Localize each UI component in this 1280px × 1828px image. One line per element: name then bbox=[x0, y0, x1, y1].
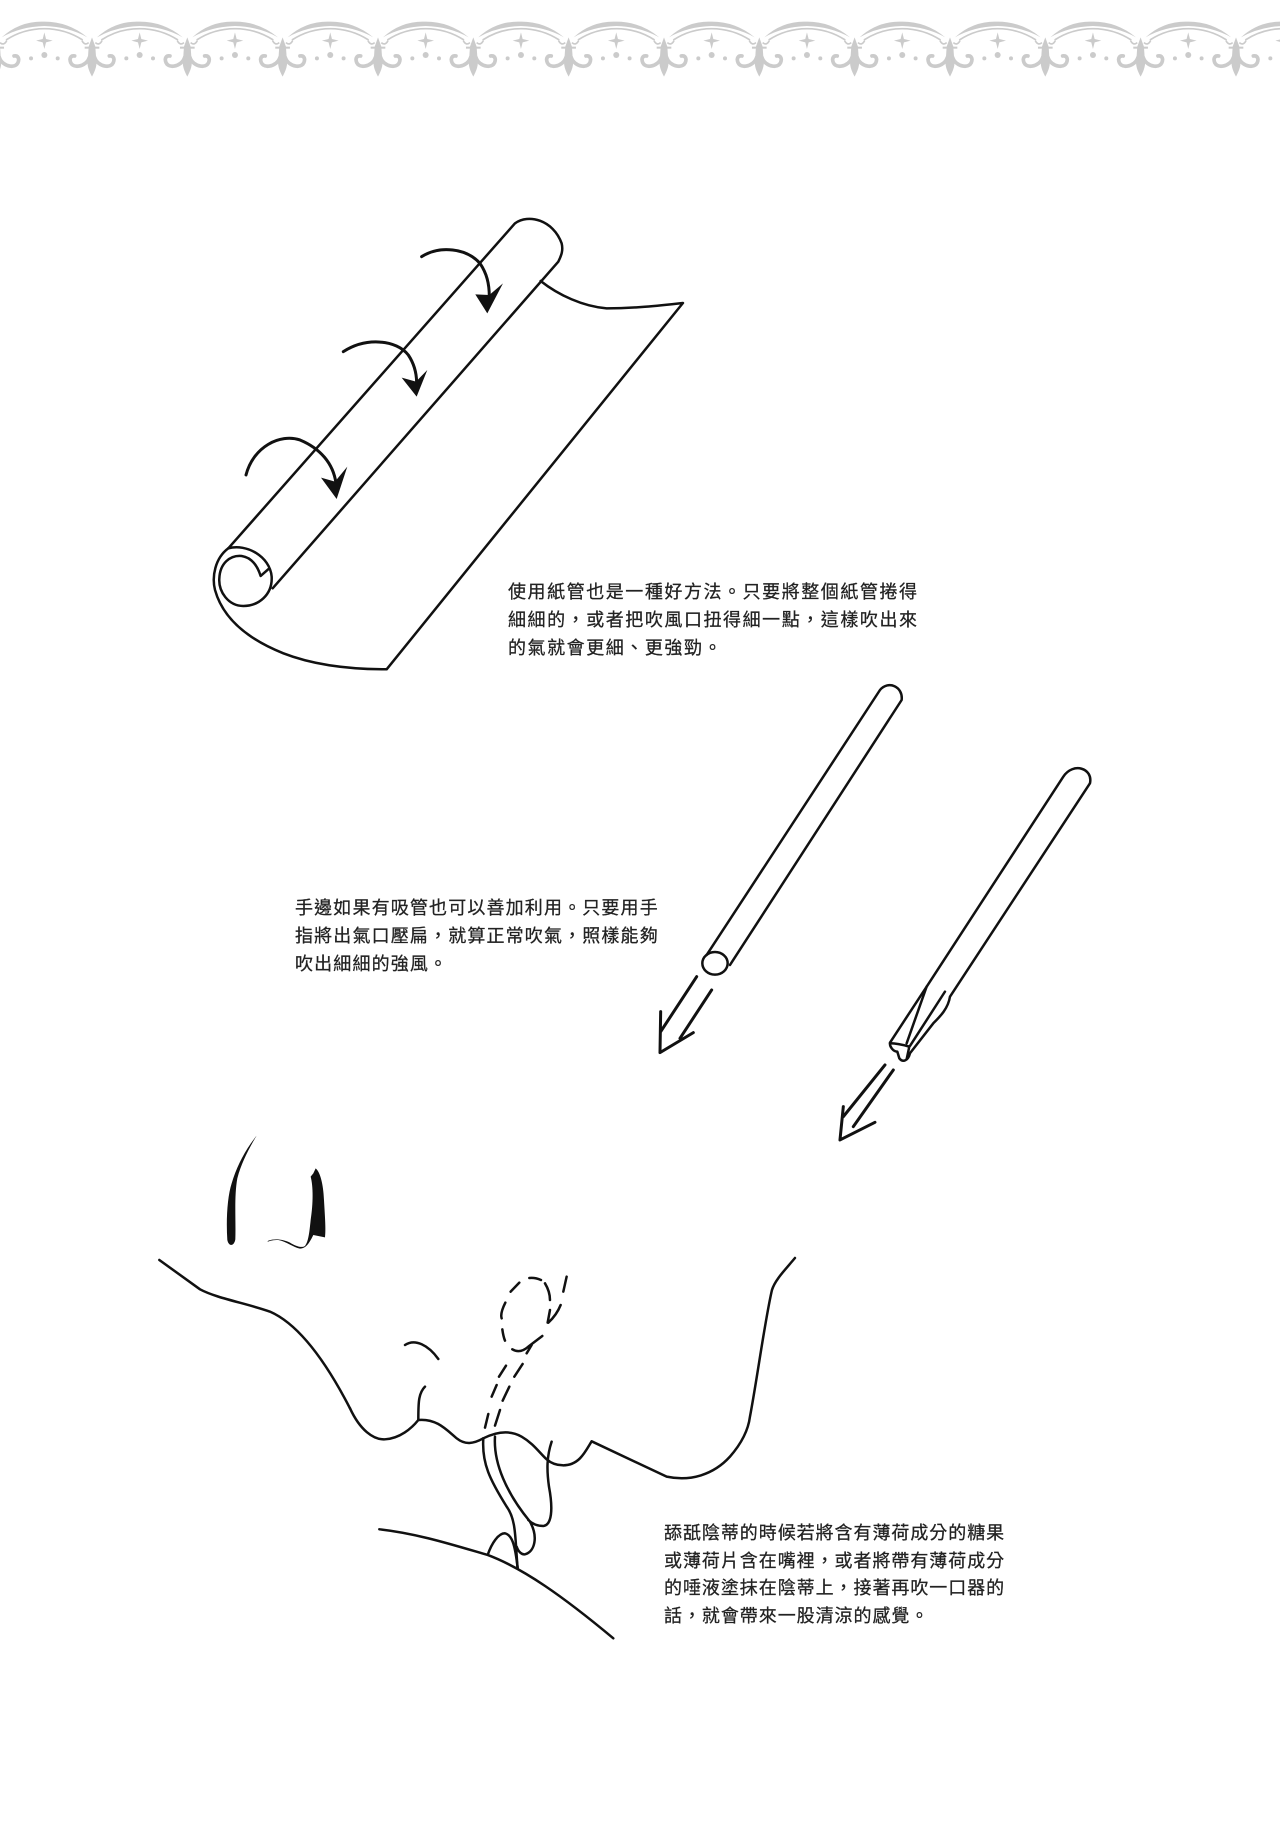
eye and nose strokes bbox=[159, 1136, 350, 1408]
text block: paper tube: 使用紙管也是一種好方法。只要將整個紙管捲得 bbox=[508, 582, 919, 602]
text block: paper tube: 細細的，或者把吹風口扭得細一點，這樣吹出來 bbox=[508, 610, 919, 630]
text block: straw bbox=[295, 898, 659, 974]
text block: mint: 的唾液塗抹在陰蒂上，接著再吹一口器的 bbox=[664, 1578, 1005, 1598]
text block: mint: 話，就會帶來一股清涼的感覺。 bbox=[664, 1606, 929, 1626]
rolling arrow: upper bbox=[422, 250, 503, 313]
text block: mint bbox=[664, 1523, 1005, 1626]
text block: mint: 或薄荷片含在嘴裡，或者將帶有薄荷成分 bbox=[664, 1550, 1005, 1570]
illustration: rolled paper tube with arrows bbox=[214, 219, 683, 669]
text block: mint: 舔舐陰蒂的時候若將含有薄荷成分的糖果 bbox=[664, 1523, 1005, 1543]
decorative lace border bbox=[0, 22, 1280, 77]
text block: paper tube bbox=[508, 582, 919, 658]
dashed mint candy and path bbox=[485, 1277, 567, 1428]
rolling arrow: lower bbox=[246, 438, 347, 499]
text block: paper tube: 的氣就會更細、更強勁。 bbox=[508, 638, 723, 658]
text block: straw: 指將出氣口壓扁，就算正常吹氣，照樣能夠 bbox=[295, 926, 659, 946]
arrow: flattened straw airflow bbox=[840, 1065, 893, 1140]
tube body and paper sheet bbox=[214, 219, 683, 669]
illustration: face profile side view bbox=[159, 1136, 795, 1638]
body contour bbox=[379, 1529, 613, 1638]
mouth and chin contour bbox=[350, 1258, 795, 1638]
tongue bbox=[483, 1437, 552, 1568]
illustration: round straw with arrow bbox=[660, 685, 902, 1053]
rolling arrow: middle bbox=[343, 342, 427, 397]
text block: straw: 吹出細細的強風。 bbox=[295, 954, 448, 974]
illustration: flattened straw with arrow bbox=[840, 768, 1090, 1140]
text block: straw: 手邊如果有吸管也可以善加利用。只要用手 bbox=[295, 898, 659, 918]
arrow: round straw airflow bbox=[660, 977, 712, 1053]
